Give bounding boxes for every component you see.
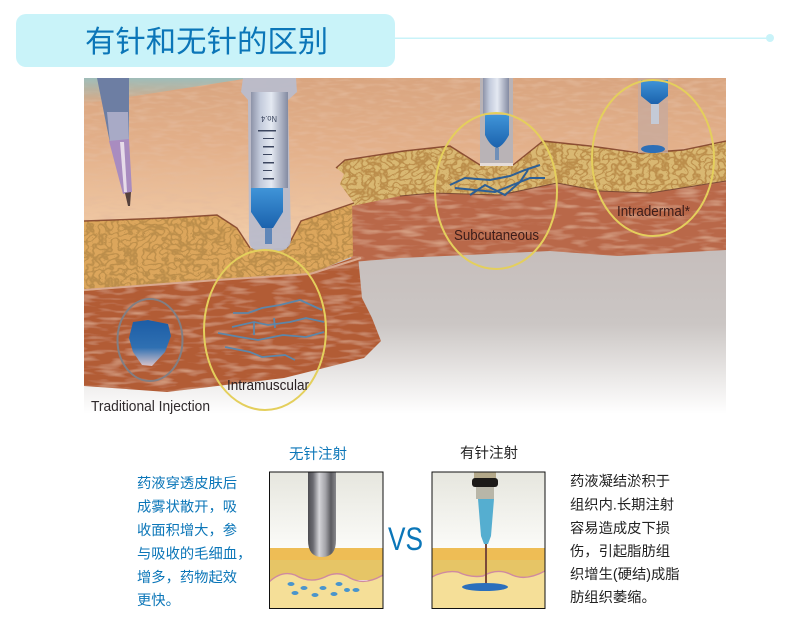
right description text: 肪组织萎缩。 xyxy=(570,589,656,606)
label: intramuscular: Intramuscular xyxy=(227,378,309,394)
left block fat layer xyxy=(84,201,353,291)
label: intradermal: Intradermal* xyxy=(617,204,690,220)
needle xyxy=(485,544,487,585)
needle injection diagram xyxy=(432,472,545,608)
skin edge outlines xyxy=(84,141,726,248)
dispersed medicine: subcutaneous xyxy=(450,165,545,195)
left description text: 药液穿透皮肤后 xyxy=(137,475,237,492)
left block muscle layer xyxy=(84,256,381,392)
title connector line with end dot xyxy=(395,34,774,42)
left description text: 与吸收的毛细血， xyxy=(137,546,251,562)
muscle shadow on right block layer xyxy=(400,181,726,196)
needle-free injection diagram xyxy=(269,472,383,608)
VS label: VS xyxy=(388,521,423,557)
right description text: 织增生(硬结)成脂 xyxy=(570,566,680,583)
needle-free nozzle xyxy=(308,472,336,557)
label: traditional injection: Traditional Injection xyxy=(91,399,210,415)
syringe cap xyxy=(474,472,496,478)
right description text: 伤，引起脂肪组 xyxy=(570,543,670,560)
intramuscular syringe xyxy=(241,78,297,251)
skin boundary wave xyxy=(269,574,383,582)
right block muscle layer xyxy=(340,178,726,262)
title banner xyxy=(16,14,395,67)
left description text: 更快。 xyxy=(137,592,180,609)
intradermal ring xyxy=(592,80,714,236)
left description text: 增多，药物起效 xyxy=(137,569,237,586)
syringe barrel xyxy=(478,499,494,544)
layer boundary highlight xyxy=(84,258,361,290)
syringe label: No.4 xyxy=(260,114,277,123)
intradermal syringe xyxy=(638,78,668,153)
heading: needle injection: 有针注射 xyxy=(460,445,518,462)
pen injector xyxy=(97,78,132,206)
right description text: 组织内.长期注射 xyxy=(570,496,674,514)
dispersed medicine: intramuscular xyxy=(218,300,324,360)
skin surface xyxy=(84,78,726,248)
traditional injection ring xyxy=(118,299,182,381)
right description text: 容易造成皮下损 xyxy=(570,520,670,537)
needle diagram frame xyxy=(432,472,545,608)
right description text: 药液凝结淤积于 xyxy=(570,473,670,490)
medicine pool: traditional injection xyxy=(129,320,171,366)
left description text: 成雾状散开，吸 xyxy=(137,498,237,516)
subcutaneous ring xyxy=(435,113,557,269)
skin top haze xyxy=(84,78,243,100)
ground background xyxy=(84,250,726,414)
right block fat layer xyxy=(325,139,726,206)
label: subcutaneous: Subcutaneous xyxy=(454,228,539,244)
heading: needle-free injection: 无针注射 xyxy=(289,446,347,463)
title text: 有针和无针的区别 xyxy=(85,25,328,59)
needle-free diagram frame xyxy=(270,472,383,608)
skin boundary wave xyxy=(432,571,545,577)
left description text: 收面积增大，参 xyxy=(137,522,237,539)
illustration: injection types compared in skin cross-section xyxy=(84,78,726,415)
subcutaneous syringe xyxy=(480,78,513,166)
intramuscular ring xyxy=(204,250,326,410)
dispersed droplets xyxy=(288,582,360,597)
syringe scale markings xyxy=(258,130,276,180)
injected medicine pool xyxy=(462,583,508,591)
